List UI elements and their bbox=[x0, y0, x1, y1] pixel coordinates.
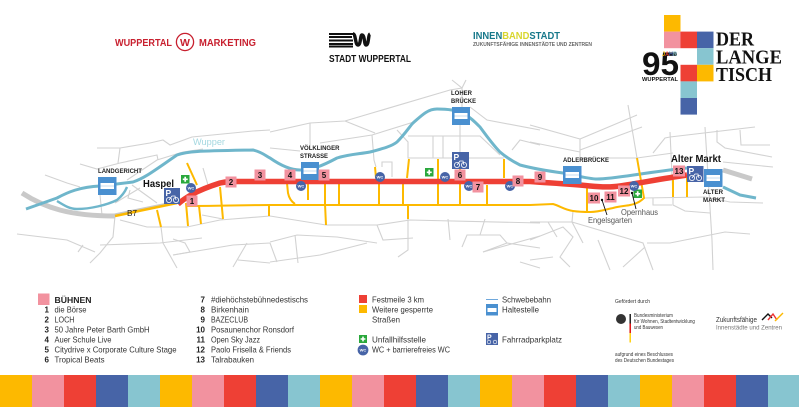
legend: Schwebebahn and parking: Haltestelle bbox=[502, 304, 539, 314]
legend: Bühnen list: 50 Jahre Peter Barth GmbH bbox=[54, 324, 150, 334]
logo: Wuppertal Marketing: W bbox=[180, 37, 190, 49]
stop: Landgericht: LANDGERICHT bbox=[98, 168, 142, 175]
legend: Bühnen list: 11 bbox=[197, 336, 206, 344]
legend: Bühnen list: Citydrive x Corporate Culture Stage bbox=[54, 344, 177, 354]
stage marker 10 bbox=[588, 192, 600, 204]
sponsor: federal ministry funding: des Deutschen Bundestages bbox=[615, 358, 674, 364]
logo: Der Lange Tisch: WUPPERTAL bbox=[642, 77, 679, 83]
callout: Opernhaus bbox=[621, 192, 658, 217]
stop: Völklinger Strasse: STRASSE bbox=[300, 153, 329, 160]
map: B7 grey road ends bbox=[22, 170, 752, 216]
stage marker 4: 4 bbox=[288, 171, 293, 180]
stop: Landgericht bbox=[98, 168, 142, 195]
icon: WC near 12 bbox=[629, 181, 639, 191]
icon: bicycle parking Haspel bbox=[164, 188, 180, 204]
sponsor: federal ministry funding bbox=[615, 299, 695, 364]
road label: B7: B7 bbox=[127, 208, 137, 218]
sponsor: Zukunftsfähige Innenstädte und Zentren: Zukunftsfähige bbox=[716, 317, 757, 324]
legend: Bühnen list: 6 bbox=[45, 356, 50, 364]
stage marker 1 bbox=[186, 196, 198, 206]
logo: Innenbandstadt bbox=[473, 31, 592, 48]
stage marker 2: 2 bbox=[229, 178, 234, 187]
stop: Völklinger Strasse: VÖLKLINGER bbox=[300, 143, 340, 152]
stage marker 7 bbox=[472, 182, 484, 192]
map: Festmeile 3 km (red) bbox=[178, 175, 687, 204]
logo: Stadt Wuppertal: STADT WUPPERTAL bbox=[329, 54, 411, 65]
stage marker 1: 1 bbox=[190, 197, 195, 206]
sponsor: federal ministry funding: für Wohnen, Stadtentwicklung bbox=[634, 319, 695, 325]
map: street network bbox=[17, 80, 773, 270]
legend: Bühnen list: BAZECLUB bbox=[211, 314, 248, 324]
icon: WC near 6 bbox=[440, 172, 450, 182]
stage marker 9 bbox=[534, 172, 546, 182]
stage marker 11: 11 bbox=[606, 193, 615, 202]
icon: WC centre west bbox=[375, 172, 385, 182]
icon: WC near 7 bbox=[464, 181, 474, 191]
icon: WC Haspel bbox=[186, 183, 196, 193]
stage marker 13: 13 bbox=[675, 167, 684, 176]
legend: streets and services bbox=[358, 294, 450, 355]
sponsor: federal ministry funding: Gefördert durch bbox=[615, 299, 650, 305]
stop: Alter Markt: ALTER bbox=[703, 189, 723, 196]
icon: WC near 6: WC bbox=[442, 174, 448, 180]
legend: Bühnen list: 8 bbox=[201, 306, 206, 314]
legend: Schwebebahn and parking: P bbox=[487, 334, 492, 342]
icon: first aid centre bbox=[425, 168, 434, 176]
stage marker 7: 7 bbox=[476, 183, 481, 192]
place label: Haspel: Haspel bbox=[143, 178, 174, 190]
logo: Innenbandstadt: ZUKUNFTSFÄHIGE INNENSTÄDTE UND ZENTREN bbox=[473, 41, 592, 48]
icon: WC 4: WC bbox=[298, 184, 304, 188]
icon: WC Haspel: WC bbox=[188, 186, 194, 190]
stage marker 8: 8 bbox=[516, 177, 521, 186]
legend: Bühnen list: 1 bbox=[45, 306, 50, 314]
stage marker 6 bbox=[454, 170, 466, 180]
stage marker 6: 6 bbox=[458, 171, 463, 180]
stop: Alter Markt: MARKT bbox=[703, 197, 725, 204]
legend: Bühnen list bbox=[38, 294, 308, 364]
legend: streets and services: Unfallhilfsstelle bbox=[372, 334, 426, 344]
logo: Der Lange Tisch: DER bbox=[716, 29, 754, 51]
logo: Der Lange Tisch: LANGE bbox=[716, 46, 782, 68]
logo: Der Lange Tisch: JAHR bbox=[662, 52, 678, 58]
stage marker 4 bbox=[284, 170, 296, 180]
legend: Bühnen list: 5 bbox=[45, 346, 50, 354]
stage marker 8 bbox=[512, 176, 524, 186]
legend: Bühnen list: Birkenhain bbox=[211, 304, 249, 314]
place label: Alter Markt: Alter Markt bbox=[671, 153, 721, 165]
legend: Schwebebahn and parking bbox=[486, 294, 562, 345]
icon: WC 4 bbox=[296, 181, 306, 191]
legend: streets and services: Weitere gesperrte bbox=[372, 304, 433, 314]
icon: WC near 12: WC bbox=[631, 184, 637, 188]
icon: bicycle parking Loher Brücke bbox=[452, 152, 469, 169]
legend: streets and services: WC bbox=[360, 348, 366, 352]
river label: Wupper: Wupper bbox=[193, 137, 225, 147]
logo: Wuppertal Marketing: WUPPERTAL bbox=[115, 38, 172, 49]
legend: Bühnen list: 3 bbox=[45, 326, 50, 334]
legend: Bühnen list: 7 bbox=[201, 296, 206, 304]
legend: Bühnen list: 2 bbox=[45, 316, 50, 324]
stage marker 5: 5 bbox=[322, 171, 327, 180]
logo: Innenbandstadt: INNENBANDSTADT bbox=[473, 31, 560, 42]
callout: Opernhaus: Opernhaus bbox=[621, 207, 658, 217]
stop: Loher Brücke bbox=[451, 90, 477, 125]
legend: Schwebebahn and parking: Fahrradparkplatz bbox=[502, 334, 562, 344]
legend: Bühnen list: Talrabauken bbox=[211, 354, 254, 364]
bottom colour band bbox=[0, 375, 799, 407]
legend: Bühnen list: Auer Schule Live bbox=[54, 334, 112, 344]
stop: Alter Markt bbox=[703, 169, 725, 204]
icon: bicycle parking Alter Markt bbox=[687, 166, 704, 182]
legend: Bühnen list: Tropical Beats bbox=[54, 354, 104, 364]
legend: Bühnen list: BÜHNEN bbox=[54, 295, 92, 305]
stop: Adlerbrücke bbox=[563, 155, 610, 184]
stage marker 3 bbox=[254, 170, 266, 180]
sponsor: Zukunftsfähige Innenstädte und Zentren bbox=[716, 313, 783, 332]
legend: streets and services: WC + barrierefreies WC bbox=[372, 344, 450, 354]
logo: Der Lange Tisch bbox=[642, 15, 782, 115]
stop: Loher Brücke: BRÜCKE bbox=[451, 96, 477, 105]
stage marker 10: 10 bbox=[590, 194, 599, 203]
legend: Bühnen list: 12 bbox=[196, 346, 206, 354]
logo: Der Lange Tisch: 95 bbox=[642, 46, 679, 82]
stage marker 3: 3 bbox=[258, 171, 263, 180]
sponsor: federal ministry funding: aufgrund eines Beschlusses bbox=[615, 352, 673, 358]
stop: Adlerbrücke: ADLERBRÜCKE bbox=[563, 155, 610, 164]
stop: Loher Brücke: LOHER bbox=[451, 90, 472, 97]
icon: first aid Opernhaus bbox=[634, 190, 642, 198]
legend: Bühnen list: LOCH bbox=[54, 314, 74, 324]
icon: bicycle parking Loher Brücke: P bbox=[454, 152, 460, 162]
stage marker 2 bbox=[226, 176, 236, 188]
stage marker 5 bbox=[318, 170, 330, 180]
icon: first aid Haspel bbox=[181, 175, 190, 184]
icon: WC near 7: WC bbox=[466, 184, 472, 188]
callout: Engelsgarten bbox=[588, 199, 632, 225]
legend: Bühnen list: die Börse bbox=[54, 304, 87, 314]
legend: Bühnen list: Open Sky Jazz bbox=[211, 334, 260, 344]
legend: Bühnen list: 4 bbox=[45, 336, 50, 344]
sponsor: Zukunftsfähige Innenstädte und Zentren: Innenstädte und Zentren bbox=[716, 324, 782, 332]
legend: Schwebebahn and parking: Schwebebahn bbox=[502, 294, 551, 304]
sponsor: federal ministry funding: und Bauwesen bbox=[634, 325, 663, 331]
icon: bicycle parking Haspel: P bbox=[166, 188, 172, 198]
stage marker 9: 9 bbox=[538, 173, 543, 182]
legend: Bühnen list: Posaunenchor Ronsdorf bbox=[211, 324, 295, 334]
legend: Bühnen list: 13 bbox=[196, 356, 206, 364]
logo: Wuppertal Marketing: MARKETING bbox=[199, 38, 256, 49]
legend: Bühnen list: 9 bbox=[201, 316, 206, 324]
icon: WC near 8: WC bbox=[507, 184, 513, 188]
stop: Völklinger Strasse bbox=[300, 143, 340, 180]
callout: Engelsgarten: Engelsgarten bbox=[588, 215, 632, 225]
legend: streets and services: Straßen bbox=[372, 314, 400, 324]
map: further closed streets (yellow) bbox=[115, 158, 687, 227]
logo: Wuppertal Marketing bbox=[115, 33, 256, 51]
map: Schwebebahn line over the Wupper bbox=[26, 109, 756, 209]
icon: bicycle parking Alter Markt: P bbox=[688, 166, 694, 176]
logo: Der Lange Tisch: TISCH bbox=[716, 64, 772, 86]
stage marker 12: 12 bbox=[620, 187, 629, 196]
logo: Stadt Wuppertal bbox=[329, 34, 411, 65]
legend: Bühnen list: #diehöchstebühnedestischs bbox=[211, 294, 308, 304]
sponsor: federal ministry funding: Bundesministerium bbox=[634, 313, 673, 319]
icon: WC near 8 bbox=[505, 181, 515, 191]
stage marker 11 bbox=[604, 192, 616, 202]
stage marker 13 bbox=[673, 166, 685, 176]
icon: WC centre west: WC bbox=[377, 174, 383, 180]
stage marker 12 bbox=[618, 186, 630, 196]
legend: Bühnen list: 10 bbox=[196, 326, 206, 334]
legend: streets and services: Festmeile 3 km bbox=[372, 294, 424, 304]
legend: Bühnen list: Paolo Frisella & Friends bbox=[211, 344, 291, 354]
